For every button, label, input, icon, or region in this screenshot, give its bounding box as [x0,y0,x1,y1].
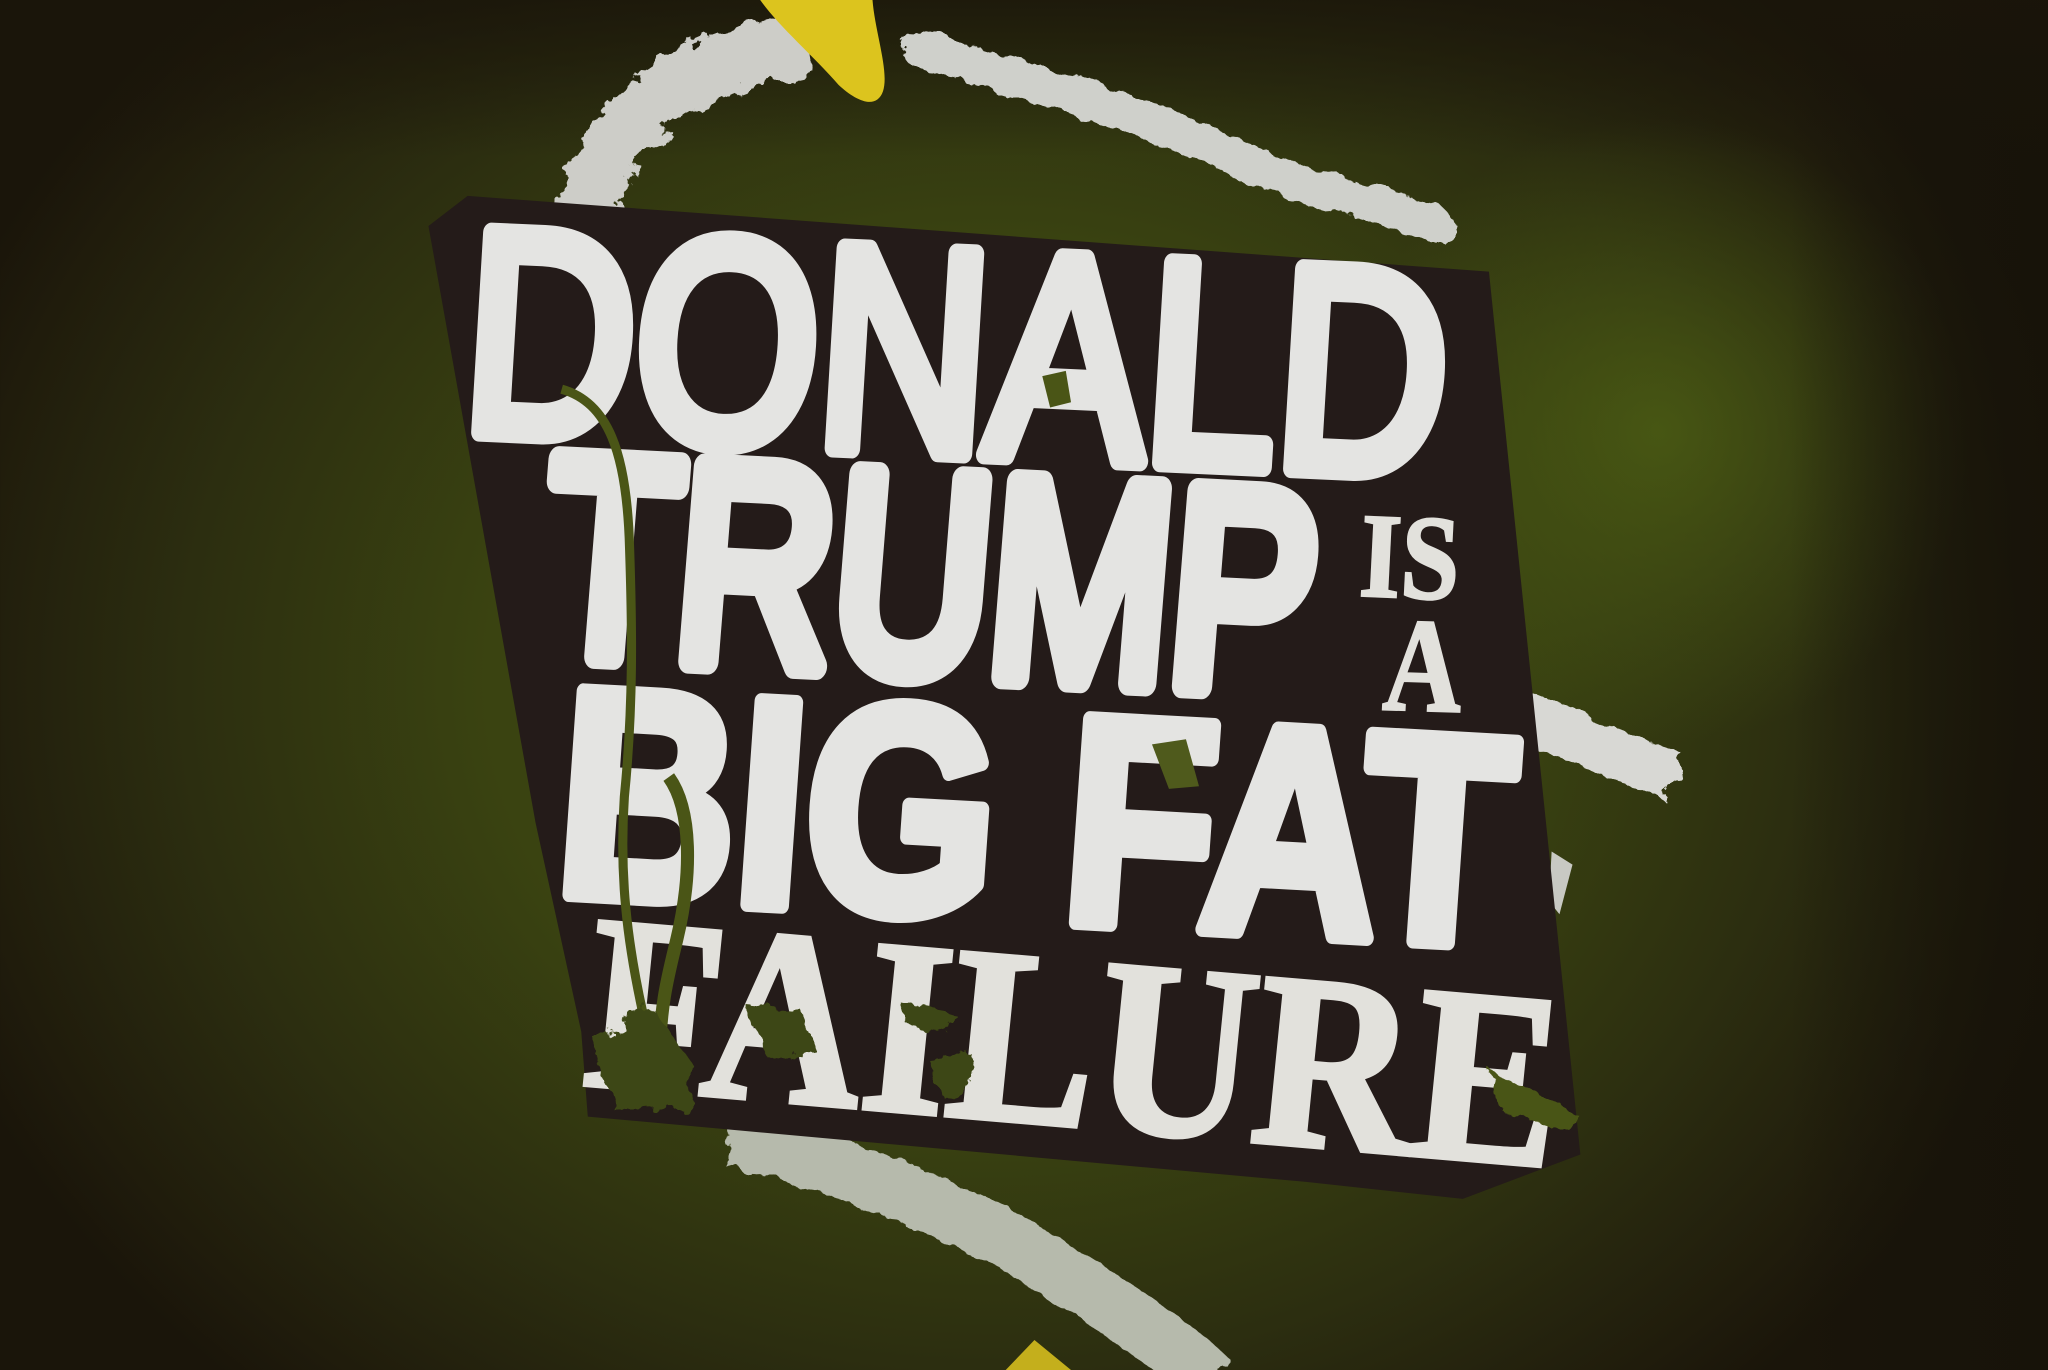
peeled patches at lower left of sticker [594,1003,973,1110]
headline word: TRUMP: TRUMP [533,398,1329,751]
small peeled chip on the A [1042,371,1071,407]
headline word: FAILURE: FAILURE [575,863,1575,1220]
peeled paint drip over the letters [562,389,643,1012]
white paint stroke, right of sticker [1502,708,1674,778]
headline words: BIG FAT: BIG FAT [548,626,1525,1009]
yellow tag, top [760,0,885,102]
white paint arc, top left [585,42,810,215]
white paint flecks, right of sticker [1549,852,1573,914]
small word: IS: IS [1357,490,1463,626]
sticker backing [428,196,1580,1199]
small peeled chip on the F [1152,739,1199,789]
second peeled paint drip [660,777,688,1058]
sticker [428,168,1580,1220]
peeled chip on the final E [1489,1068,1580,1131]
small word: A: A [1380,590,1466,740]
yellow tag, bottom [1006,1340,1071,1370]
white paint stroke, bottom [731,1136,1208,1370]
white paint stroke, top right [921,50,1434,225]
headline word: DONALD: DONALD [456,168,1458,537]
